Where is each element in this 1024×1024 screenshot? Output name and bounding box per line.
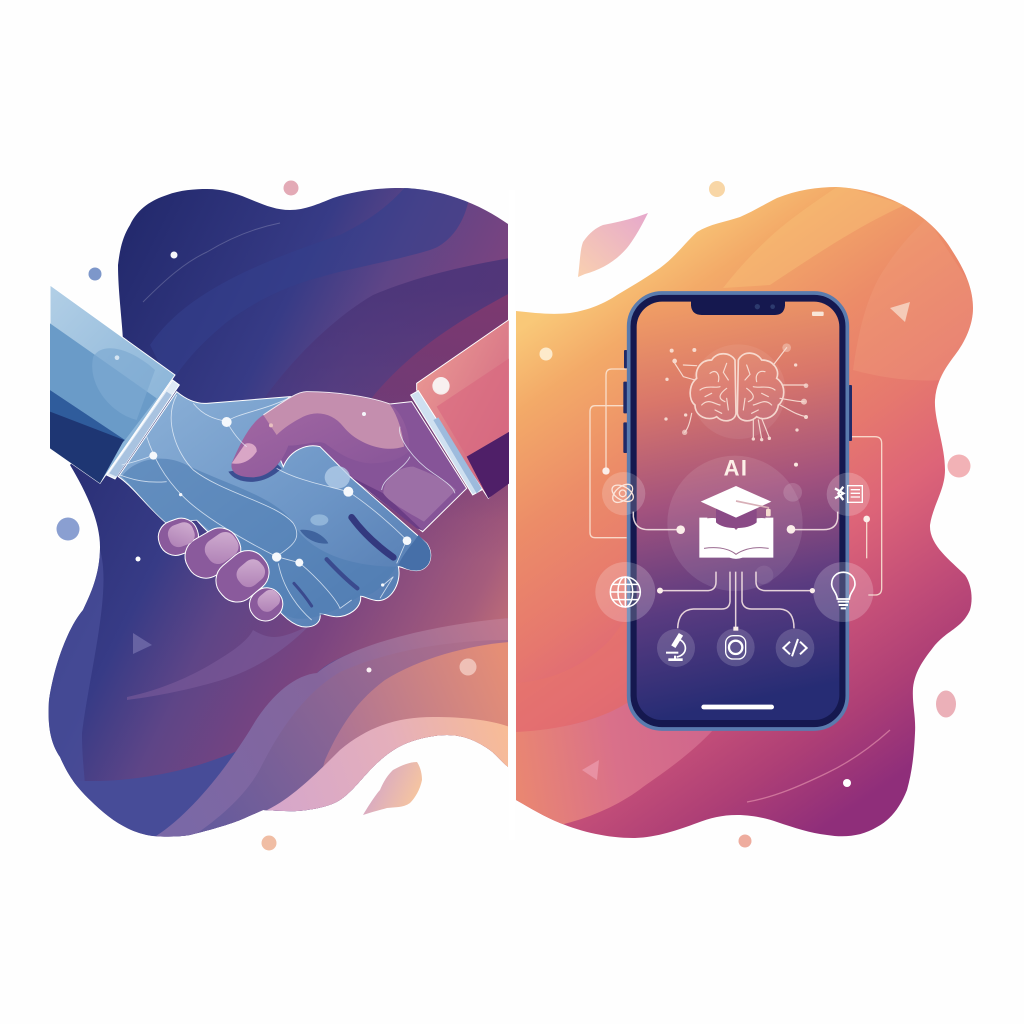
- phone body: [629, 293, 847, 729]
- left shirt cuff: [107, 380, 179, 479]
- decorative dots and triangles, left: [56, 180, 476, 850]
- connectors outside phone: [590, 369, 882, 595]
- blue hand: [118, 392, 431, 627]
- panel: AI education phone illustration: [516, 180, 986, 848]
- leaf accent, left: [363, 762, 422, 815]
- side buttons: [623, 350, 852, 453]
- handshake hands: [118, 392, 467, 627]
- network lines on hands: [120, 395, 455, 620]
- purple hand back: [263, 402, 467, 532]
- icon: document list: [827, 473, 870, 516]
- icon: globe: [595, 562, 655, 622]
- graduation cap and open book icon: [699, 486, 773, 559]
- purple thumb: [231, 392, 409, 477]
- left sleeve: [50, 285, 179, 483]
- right shirt cuff: [411, 391, 482, 495]
- brain icon and neural nodes: [664, 343, 808, 441]
- left wavy gradient blob: [40, 180, 510, 850]
- home indicator: [701, 705, 774, 709]
- icon: code brackets: [776, 629, 814, 667]
- central glow circle: [667, 456, 803, 591]
- leaf accent, right: [578, 213, 648, 277]
- phone screen: [637, 302, 839, 720]
- notch: [691, 301, 785, 315]
- centre divider line: [509, 190, 515, 840]
- network nodes: [149, 412, 411, 587]
- purple fingers: [154, 514, 289, 627]
- icon: microscope: [657, 629, 695, 667]
- smartphone: [595, 293, 873, 729]
- right wavy gradient blob: [516, 180, 986, 845]
- circuit connectors inside phone: [633, 512, 838, 628]
- status battery icon: [812, 312, 824, 316]
- decorative dots and triangles, right: [540, 181, 970, 848]
- icon: atom: [602, 472, 645, 515]
- icon: light bulb: [813, 562, 873, 622]
- AI label: AI: [724, 456, 748, 481]
- camera dots: [755, 304, 775, 309]
- icon: circuit chip: [717, 627, 755, 666]
- panel: handshake partnership illustration: [40, 180, 510, 850]
- right sleeve: [411, 319, 509, 498]
